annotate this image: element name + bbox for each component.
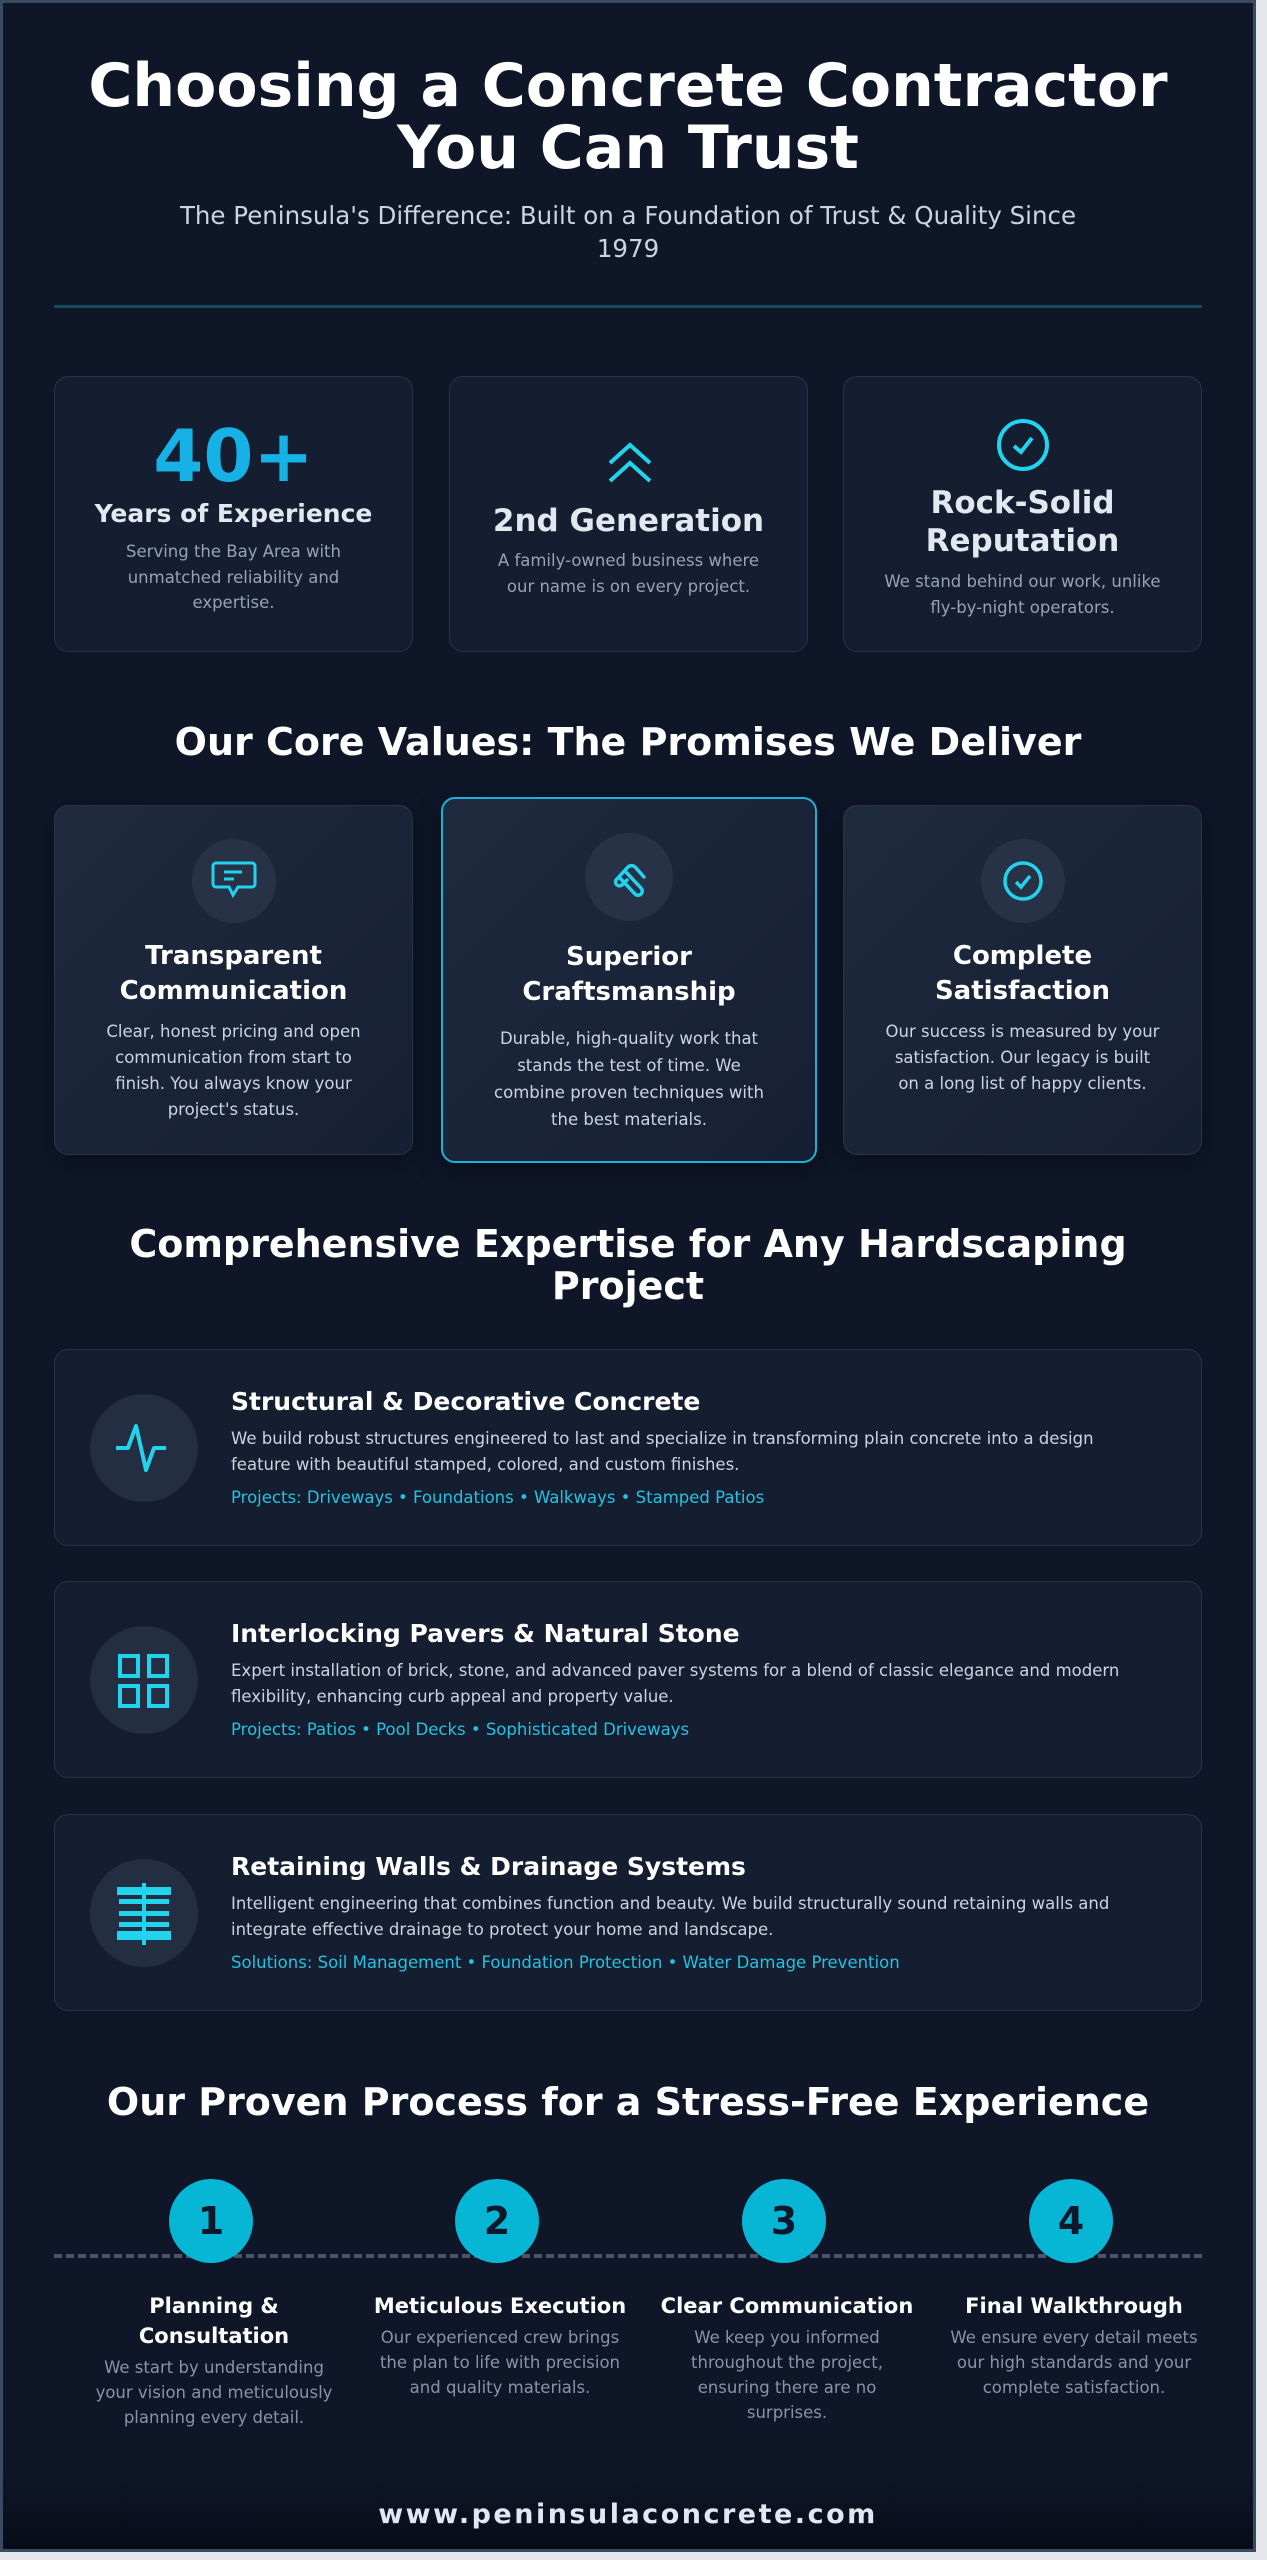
step 1 text: Consultation — [139, 2324, 289, 2348]
step 1 text: Planning & — [149, 2294, 279, 2318]
footer: www.peninsulaconcrete.com — [378, 2499, 878, 2530]
step 3 text — [661, 2294, 913, 2422]
heading: process: Our Proven Process for a Stress-Free Experience — [107, 2080, 1149, 2124]
service: pavers: Expert installation of brick, stone, and advanced paver systems for a blend of classic elegance and modern flexibility, enhancing curb appeal and property value. — [231, 1661, 1119, 1706]
step 3 text: Clear Communication — [661, 2294, 913, 2318]
step 2 text: Our experienced crew brings the plan to life with precision and quality materials. — [380, 2328, 620, 2397]
step 4 — [1029, 2179, 1113, 2263]
title: Choosing a Concrete Contractor — [88, 51, 1168, 121]
service: retaining walls — [54, 1814, 1202, 2011]
value card: transparent communication — [54, 805, 413, 1155]
value card: superior craftsmanship — [441, 797, 817, 1163]
icon: chat — [192, 839, 276, 923]
icon: tool — [585, 833, 673, 921]
heading: core values: Our Core Values: The Promises We Deliver — [175, 720, 1081, 764]
value card: complete satisfaction: Satisfaction — [935, 976, 1110, 1006]
icon: check — [980, 839, 1064, 923]
step 2 text: Meticulous Execution — [374, 2294, 626, 2318]
service: pavers: Projects: Patios • Pool Decks • Sophisticated Driveways — [231, 1720, 689, 1739]
step 1 — [169, 2179, 253, 2263]
title — [88, 51, 1168, 183]
value card: superior craftsmanship: Durable, high-quality work that stands the test of time. We combine proven techniques with the best materials. — [494, 1029, 764, 1129]
value card: transparent communication: Clear, honest pricing and open communication from start to finish. You always know your project's status. — [106, 1022, 361, 1119]
icon: check circle — [997, 419, 1049, 471]
stat card: reputation: Reputation — [926, 523, 1119, 559]
stat card: 2nd generation: A family-owned business where our name is on every project. — [498, 551, 759, 596]
step 2 — [455, 2179, 539, 2263]
icon: pulse — [90, 1394, 198, 1502]
stat card: reputation: Rock-Solid — [930, 485, 1115, 521]
step 3 text: We keep you informed throughout the project, ensuring there are no surprises. — [691, 2328, 883, 2422]
step 4 text: We ensure every detail meets our high standards and your complete satisfaction. — [950, 2328, 1198, 2397]
step 3 — [742, 2179, 826, 2263]
service: concrete: Structural & Decorative Concrete — [231, 1387, 700, 1416]
stat card: reputation — [843, 376, 1202, 652]
big number: 40+ — [153, 414, 314, 498]
stat card: 40+ years: Serving the Bay Area with unmatched reliability and expertise. — [126, 542, 341, 612]
stat card: 2nd generation — [449, 376, 808, 652]
service: retaining walls: Intelligent engineering that combines function and beauty. We build structurally sound retaining walls and integrate effective drainage to protect your home and landscape. — [231, 1894, 1109, 1939]
value card: complete satisfaction: Our success is measured by your satisfaction. Our legacy is built on a long list of happy clients. — [886, 1022, 1159, 1093]
icon: wall — [90, 1859, 198, 1967]
step 4 text: Final Walkthrough — [965, 2294, 1183, 2318]
icon: grid — [90, 1626, 198, 1734]
value card: transparent communication: Communication — [120, 976, 347, 1006]
value card: superior craftsmanship: Superior — [566, 942, 692, 972]
service: pavers — [54, 1581, 1202, 1778]
value card: complete satisfaction — [843, 805, 1202, 1155]
step 4: 4 — [1058, 2199, 1084, 2243]
stat card: reputation: We stand behind our work, unlike fly-by-night operators. — [884, 572, 1161, 616]
service: pavers: Interlocking Pavers & Natural Stone — [231, 1619, 740, 1648]
step 2 text — [374, 2294, 626, 2397]
icon: chevrons — [608, 442, 652, 482]
value card: complete satisfaction: Complete — [953, 941, 1092, 971]
step 4 text — [950, 2294, 1198, 2397]
footer — [3, 2473, 1253, 2555]
heading: expertise: Comprehensive Expertise for Any Hardscaping Project — [129, 1222, 1127, 1308]
step 3: 3 — [771, 2199, 797, 2243]
value card: transparent communication: Transparent — [145, 941, 322, 971]
service: concrete: Projects: Driveways • Foundations • Walkways • Stamped Patios — [231, 1488, 764, 1507]
service: concrete: We build robust structures engineered to last and specialize in transforming plain concrete into a design feature with beautiful stamped, colored, and custom finishes. — [231, 1429, 1094, 1474]
service: retaining walls: Retaining Walls & Drainage Systems — [231, 1852, 746, 1881]
service: concrete — [54, 1349, 1202, 1546]
stat card: 2nd generation: 2nd Generation — [493, 503, 764, 539]
step 1 text: We start by understanding your vision and meticulously planning every detail. — [96, 2358, 332, 2427]
stat card: 40+ years: Years of Experience — [95, 499, 372, 528]
step 1 text — [96, 2294, 332, 2427]
step 1: 1 — [198, 2199, 224, 2243]
subtitle: The Peninsula's Difference: Built on a Foundation of Trust & Quality Since 1979 — [180, 201, 1076, 263]
step 2: 2 — [484, 2199, 510, 2243]
title: You Can Trust — [397, 113, 859, 183]
service: retaining walls: Solutions: Soil Management • Foundation Protection • Water Damage Prevention — [231, 1953, 900, 1972]
value card: superior craftsmanship: Craftsmanship — [522, 977, 736, 1007]
stat card: 40+ years — [54, 376, 413, 652]
